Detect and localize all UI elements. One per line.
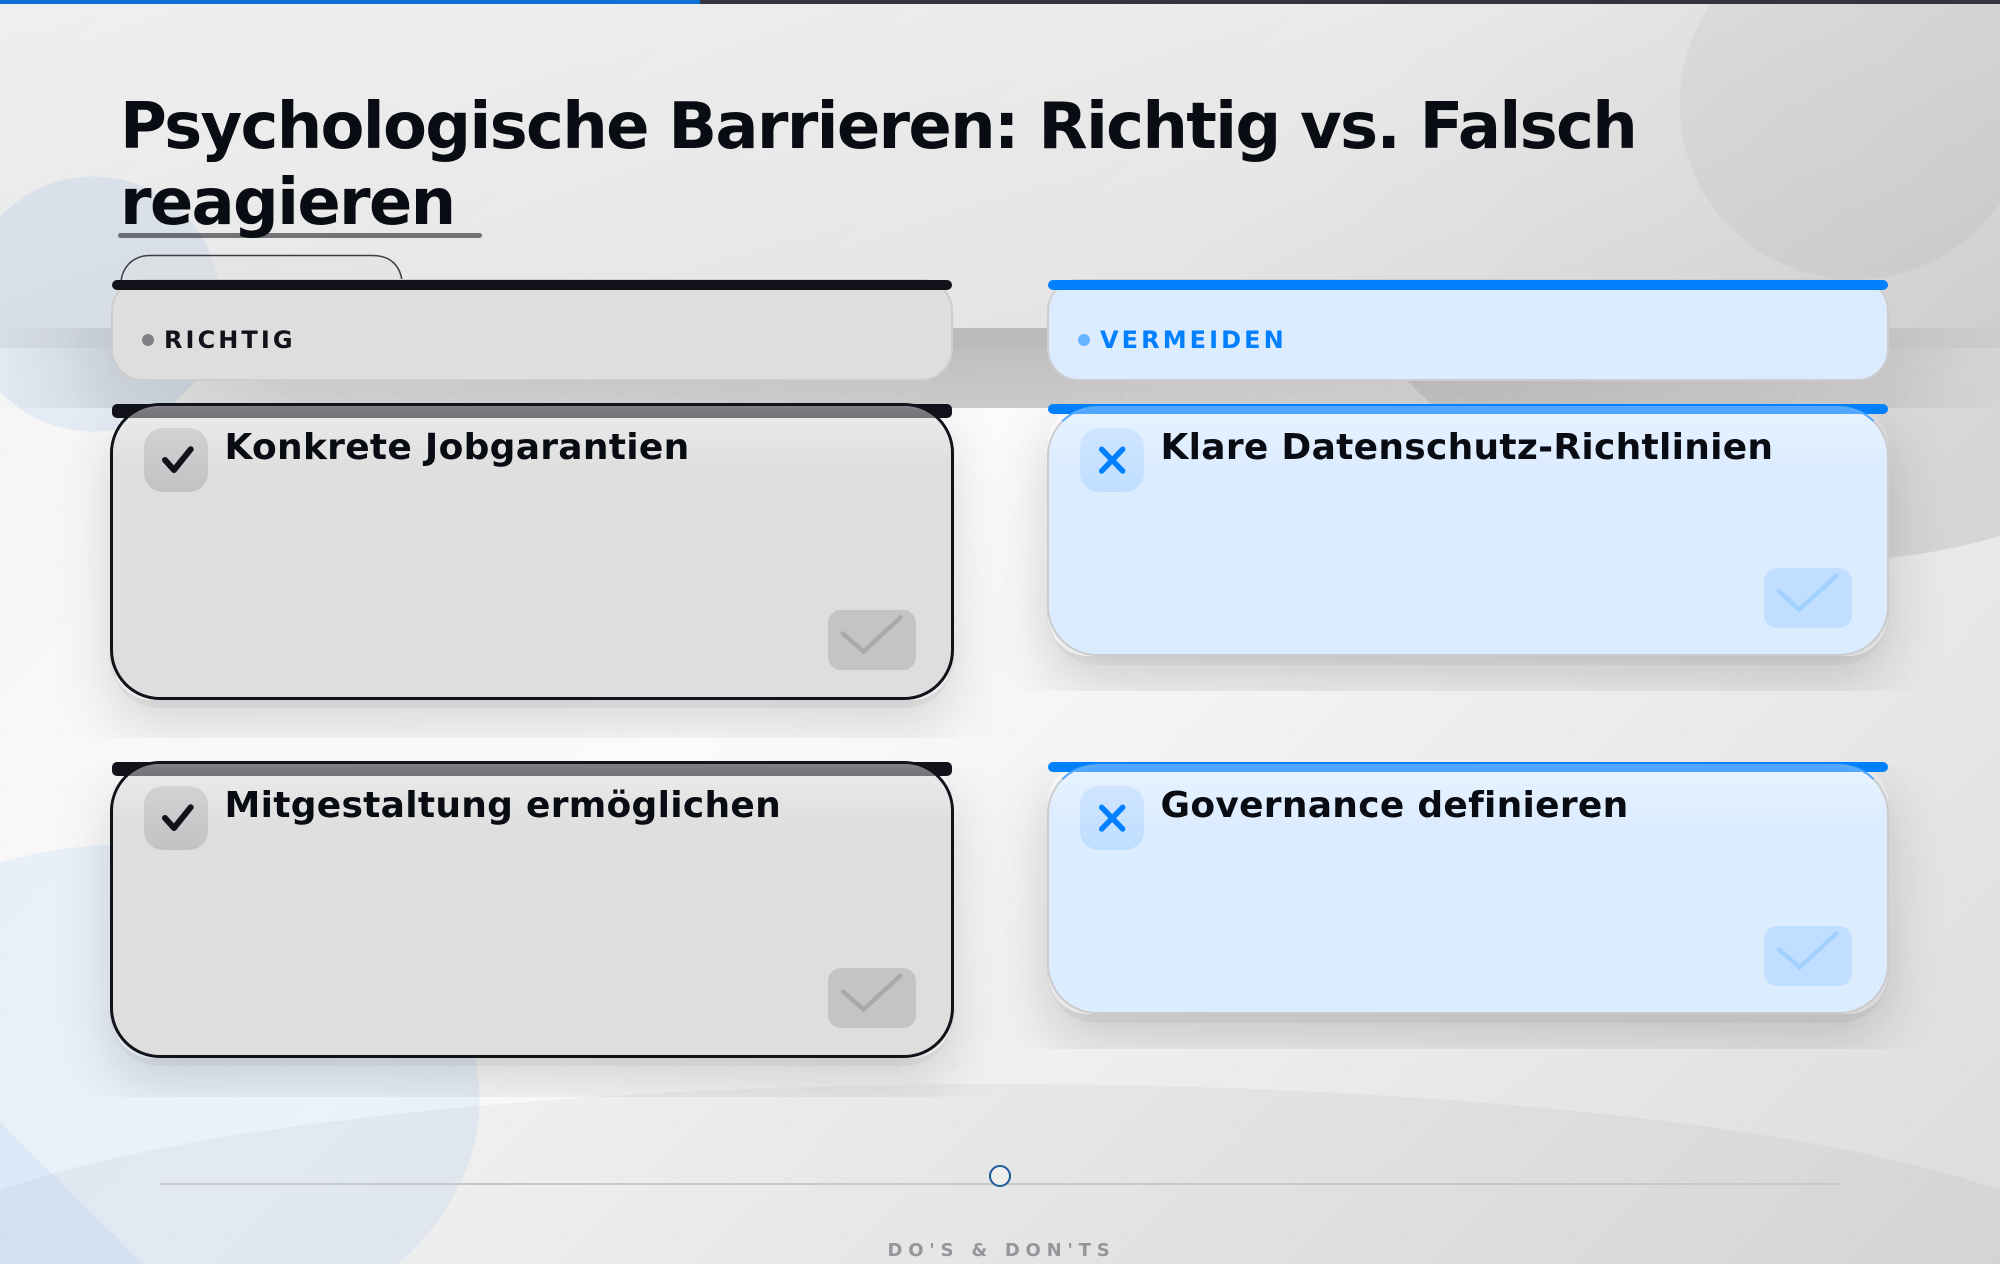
card heading: Konkrete Jobgarantien [224, 427, 690, 468]
header accent bar [112, 280, 952, 290]
footer circle marker [989, 1165, 1011, 1187]
icon: check [144, 428, 208, 492]
label: vermeiden: VERMEIDEN [1100, 326, 1287, 354]
status dot [142, 334, 154, 346]
decorative blue triangle lower left [0, 1122, 143, 1264]
top progress bar [0, 0, 2000, 4]
corner badge: check [828, 610, 916, 670]
label: richtig: RICHTIG [164, 326, 296, 354]
card: Konkrete Jobgarantien [110, 403, 954, 708]
card: Klare Datenschutz-Richtlinien [1047, 404, 1889, 656]
dot pattern [0, 348, 2000, 1264]
corner badge: check [1764, 926, 1852, 986]
tab outline above left header [120, 254, 402, 280]
icon: cross [1080, 786, 1144, 850]
corner badge: check [828, 968, 916, 1028]
icon: check [144, 786, 208, 850]
panel: vermeiden header [1047, 279, 1889, 381]
decorative large grey circle right [0, 348, 2000, 1264]
footer divider line [160, 1183, 1839, 1185]
card heading: Governance definieren [1160, 785, 1629, 826]
header accent bar [1048, 280, 1888, 290]
title underline [118, 233, 482, 238]
card heading: Klare Datenschutz-Richtlinien [1160, 427, 1773, 468]
panel: richtig header [111, 279, 953, 381]
title: reagieren [120, 166, 454, 240]
card: Mitgestaltung ermöglichen [110, 761, 954, 1066]
status dot [1078, 334, 1090, 346]
icon: cross [1080, 428, 1144, 492]
title: Psychologische Barrieren: Richtig vs. Falsch [120, 90, 1636, 164]
title [120, 90, 1636, 240]
card: Governance definieren [1047, 762, 1889, 1014]
header tint band [0, 0, 2000, 348]
card heading: Mitgestaltung ermöglichen [224, 785, 781, 826]
footer label: DO'S & DON'TS [888, 1240, 1115, 1261]
corner badge: check [1764, 568, 1852, 628]
